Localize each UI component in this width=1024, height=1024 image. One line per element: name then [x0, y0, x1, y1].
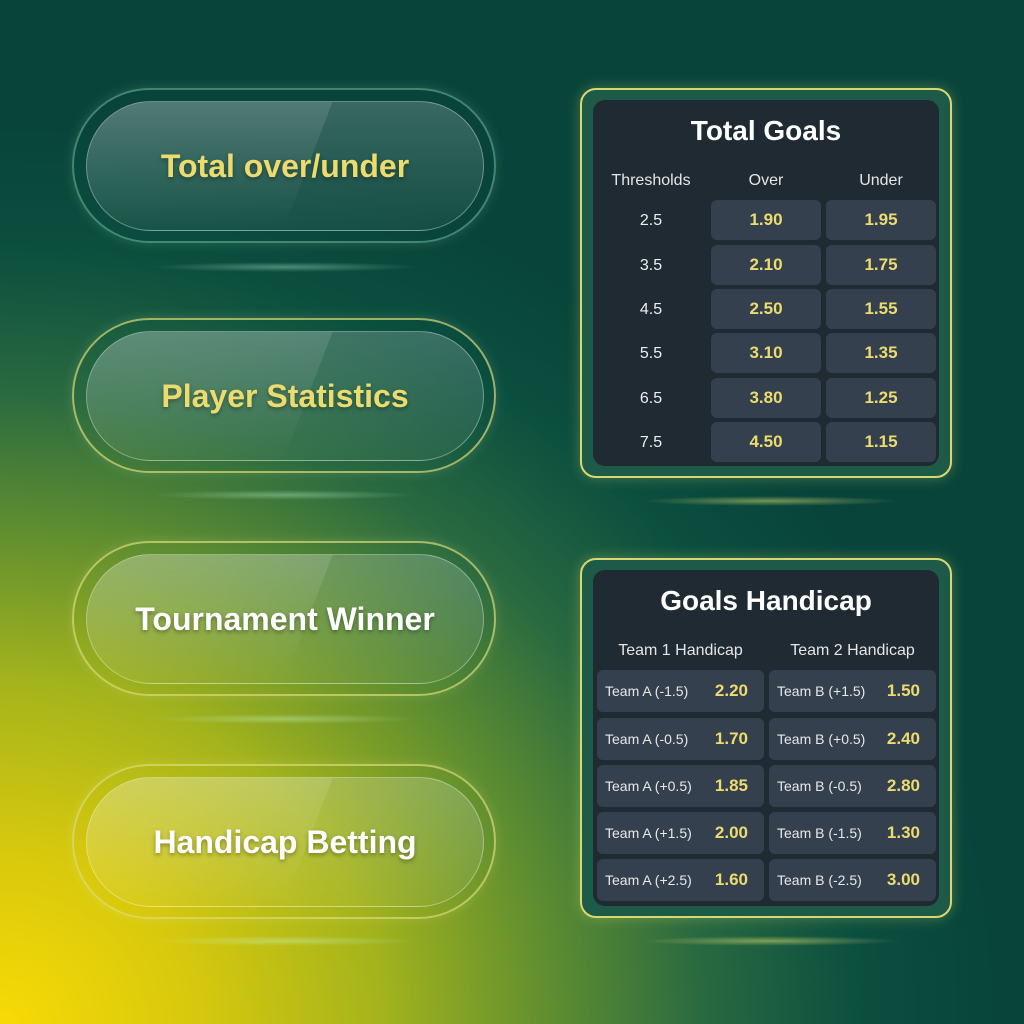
panel: Goals Handicap — [580, 558, 952, 918]
panel: Goals Handicap: Team A (-1.5) — [605, 683, 688, 699]
panel: Goals Handicap: 3.00 — [887, 870, 920, 889]
panel: Total Goals: 3.80 — [749, 388, 783, 407]
pill: Total over/under — [72, 88, 496, 243]
panel: Goals Handicap: 1.85 — [715, 776, 748, 795]
panel: Goals Handicap: Team A (+2.5) — [605, 872, 692, 888]
panel: Goals Handicap: 1.50 — [887, 681, 920, 700]
panel: Goals Handicap: 2.00 — [715, 823, 748, 842]
panel: Goals Handicap: 2.20 — [715, 681, 748, 700]
panel: Total Goals: 7.5 — [640, 434, 662, 451]
panel: Goals Handicap: Team 1 Handicap — [618, 642, 743, 659]
panel: Goals Handicap: 1.30 — [887, 823, 920, 842]
panel: Total Goals: Under — [859, 172, 903, 189]
panel: Total Goals: 4.50 — [749, 432, 783, 451]
panel: Total Goals: 1.75 — [864, 255, 898, 274]
panel: Total Goals: Thresholds — [611, 172, 691, 189]
pill: Handicap Betting — [72, 764, 496, 919]
pill: Tournament Winner: Tournament Winner — [135, 600, 435, 636]
panel: Total Goals — [580, 88, 952, 478]
panel: Total Goals: 5.5 — [640, 345, 662, 362]
panel: Goals Handicap: Team A (-0.5) — [605, 731, 688, 747]
heading: Total Goals — [691, 115, 841, 146]
panel: Total Goals: 1.15 — [864, 432, 898, 451]
pill: Player Statistics — [72, 318, 496, 473]
panel: Goals Handicap: Team 2 Handicap — [790, 642, 915, 659]
panel: Total Goals: 2.5 — [640, 212, 662, 229]
panel: Total Goals: 6.5 — [640, 390, 662, 407]
panel: Goals Handicap: Team A (+1.5) — [605, 825, 692, 841]
panel: Total Goals: 1.55 — [864, 299, 898, 318]
panel: Total Goals: 2.10 — [749, 255, 783, 274]
pill: Tournament Winner — [72, 541, 496, 696]
pill: Total over/under: Total over/under — [161, 148, 409, 184]
panel: Goals Handicap: 1.60 — [715, 870, 748, 889]
panel: Total Goals: 1.90 — [749, 210, 783, 229]
panel: Total Goals: 2.50 — [749, 299, 783, 318]
panel: Total Goals: Over — [749, 172, 783, 189]
panel: Goals Handicap: Team B (-1.5) — [777, 825, 862, 841]
panel: Total Goals: 1.25 — [864, 388, 898, 407]
panel: Total Goals: 1.95 — [864, 210, 898, 229]
panel: Total Goals: 1.35 — [864, 343, 898, 362]
panel: Total Goals: 4.5 — [640, 301, 662, 318]
panel: Goals Handicap: Team B (-2.5) — [777, 872, 862, 888]
pill: Handicap Betting: Handicap Betting — [153, 824, 417, 860]
panel: Total Goals: 3.5 — [640, 257, 662, 274]
panel: Total Goals: 3.10 — [749, 343, 783, 362]
heading: Goals Handicap — [660, 585, 872, 616]
panel: Goals Handicap: Team B (-0.5) — [777, 778, 862, 794]
panel: Goals Handicap: Team B (+0.5) — [777, 731, 865, 747]
pill: Player Statistics: Player Statistics — [161, 378, 409, 414]
panel: Goals Handicap: Team A (+0.5) — [605, 778, 692, 794]
panel: Goals Handicap: 1.70 — [715, 729, 748, 748]
panel: Goals Handicap: Team B (+1.5) — [777, 683, 865, 699]
panel: Goals Handicap: 2.40 — [887, 729, 920, 748]
panel: Goals Handicap: 2.80 — [887, 776, 920, 795]
